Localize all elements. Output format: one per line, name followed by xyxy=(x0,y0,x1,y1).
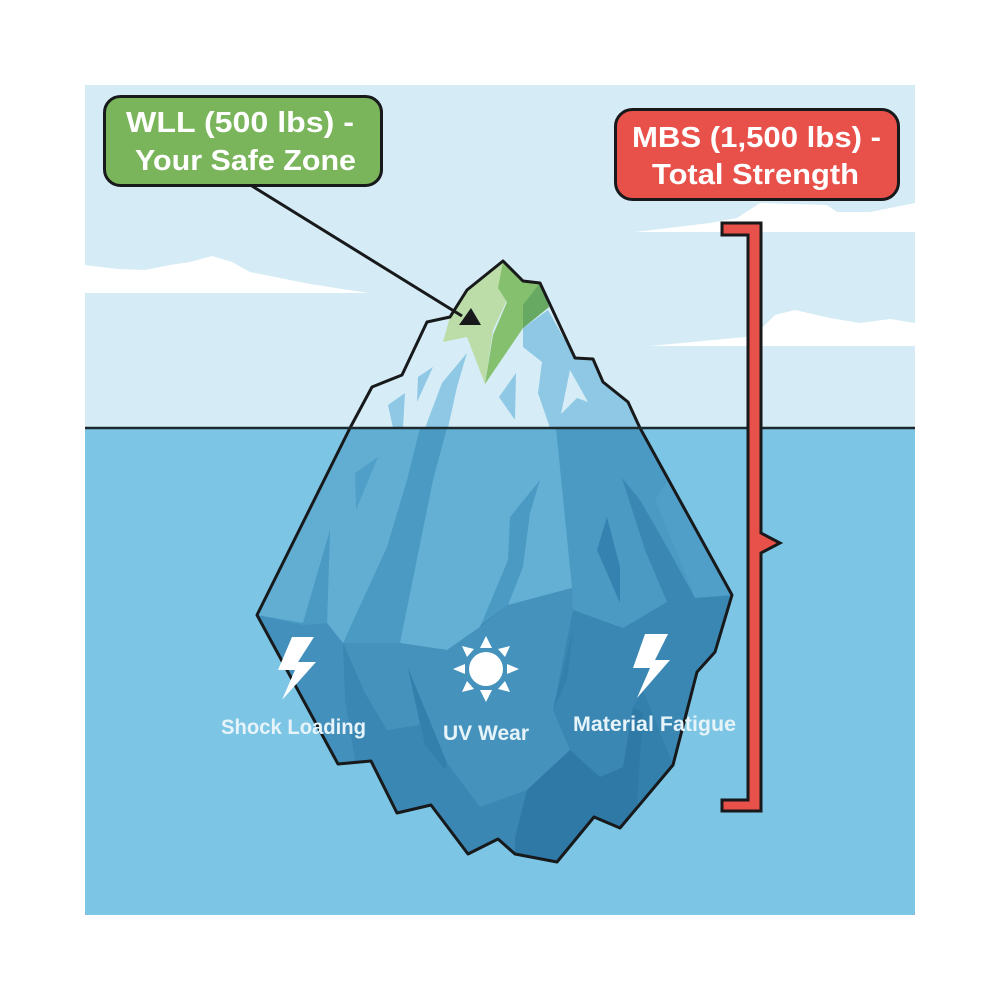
label: material fatigue: Material Fatigue xyxy=(573,713,736,736)
right gash xyxy=(597,517,620,603)
iceberg xyxy=(257,261,732,862)
cloud: upper right xyxy=(635,203,915,232)
deep lower-right facet xyxy=(515,707,643,862)
green safe zone: light xyxy=(443,263,507,384)
MBS callout xyxy=(616,110,898,200)
left gash xyxy=(355,457,378,510)
label: shock loading: Shock Loading xyxy=(221,716,366,739)
left lower lobe xyxy=(257,615,355,764)
right light facet xyxy=(605,428,732,598)
water background xyxy=(85,428,915,915)
MBS callout: MBS (1,500 lbs) - xyxy=(632,122,881,154)
green safe zone: mid xyxy=(485,262,549,384)
central light facet xyxy=(400,428,572,650)
iceberg above water xyxy=(350,261,640,428)
icon: lightning, material fatigue xyxy=(633,634,670,698)
left lower facet xyxy=(343,643,420,730)
MBS bracket xyxy=(722,223,780,811)
cloud: lower right xyxy=(650,310,915,346)
central dark strip xyxy=(408,668,447,770)
WLL callout xyxy=(104,96,382,186)
right dark strip xyxy=(622,478,695,602)
centre lower body xyxy=(400,588,573,807)
above-water shadows xyxy=(388,310,640,428)
icon: lightning, shock loading xyxy=(278,637,316,700)
left underwater facet xyxy=(257,428,420,643)
green safe zone: dark xyxy=(523,283,549,328)
WLL callout: Your Safe Zone xyxy=(135,145,356,177)
WLL callout: WLL (500 lbs) - xyxy=(126,107,354,139)
lower body mass xyxy=(257,595,732,862)
outline xyxy=(257,261,732,862)
iceberg infographic xyxy=(85,85,915,915)
left wedge xyxy=(303,530,330,623)
arrow: WLL to iceberg tip xyxy=(252,186,481,325)
sky background xyxy=(85,85,915,428)
right outer light facet xyxy=(655,480,732,598)
above-water highlight facet xyxy=(561,370,588,414)
right lower shade xyxy=(633,690,673,805)
icon: sun, UV wear xyxy=(453,636,519,702)
MBS callout: Total Strength xyxy=(652,159,859,191)
central crack xyxy=(553,630,573,710)
cloud: left xyxy=(85,256,368,293)
label: UV wear: UV Wear xyxy=(443,722,529,745)
underwater base xyxy=(257,428,732,862)
waterline xyxy=(85,427,915,429)
